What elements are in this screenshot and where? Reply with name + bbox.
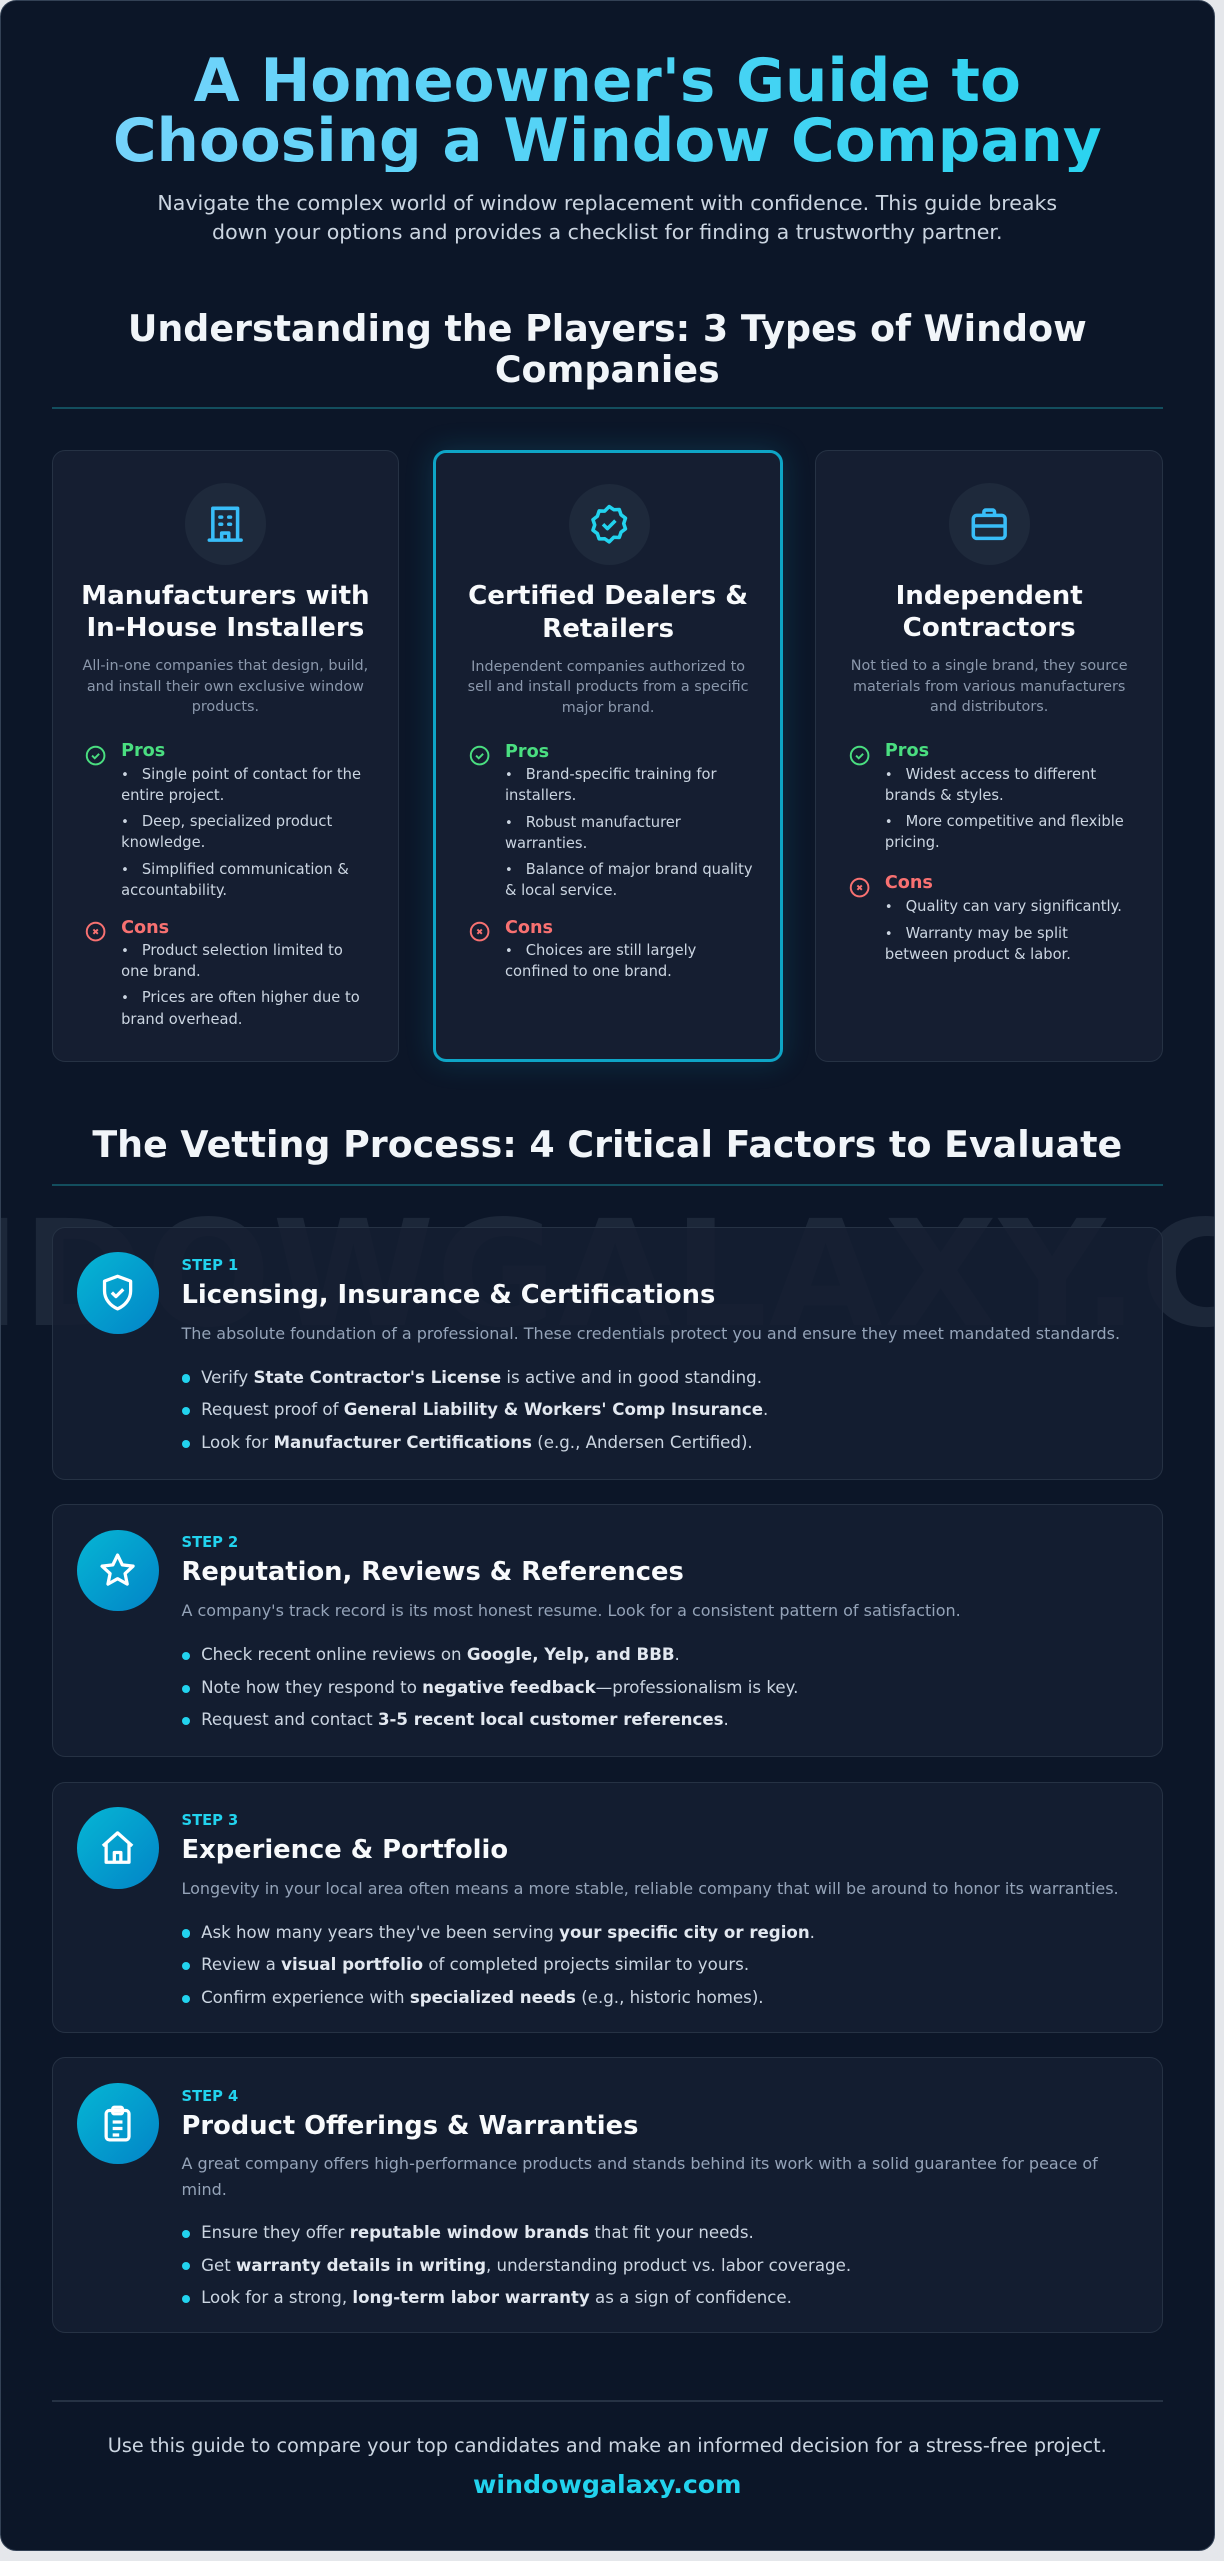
step 2 (52, 1504, 1163, 1757)
step 2: Request and contact 3-5 recent local customer references. (201, 1710, 729, 1729)
icon: shield (77, 1252, 159, 1334)
pros: Deep, specialized product knowledge. (121, 813, 332, 851)
step 1: Look for Manufacturer Certifications (e.g., Andersen Certified). (201, 1433, 753, 1452)
section heading: types: Understanding the Players: 3 Types of Window Companies (128, 307, 1087, 391)
icon: clipboard (77, 2083, 159, 2164)
step 4: Product Offerings & Warranties (182, 2111, 638, 2141)
cons: Warranty may be split between product & labor. (885, 925, 1071, 963)
step 2: Check recent online reviews on Google, Yelp, and BBB. (201, 1645, 680, 1664)
pros: More competitive and flexible pricing. (885, 813, 1124, 851)
cons: Quality can vary significantly. (906, 898, 1122, 915)
step 2: Note how they respond to negative feedback—professionalism is key. (201, 1678, 798, 1697)
pros (470, 742, 753, 899)
step 2: STEP 2 (182, 1534, 238, 1551)
pros: Robust manufacturer warranties. (505, 814, 681, 852)
card title: Independent Contractors (896, 581, 1083, 643)
footer text: Use this guide to compare your top candidates and make an informed decision for a stress-free project. (108, 2434, 1107, 2457)
pros (850, 741, 1124, 851)
panel: manufacturers (52, 450, 399, 1062)
subtitle: Navigate the complex world of window replacement with confidence. This guide breaks down your options and provides a checklist for finding a trustworthy partner. (157, 191, 1057, 244)
cons (850, 873, 1122, 963)
step 3: Ask how many years they've been serving your specific city or region. (201, 1923, 815, 1942)
title: A Homeowner's Guide to (194, 47, 1021, 116)
cons: Prices are often higher due to brand overhead. (121, 989, 360, 1028)
step 1 (52, 1227, 1163, 1480)
step 4 (52, 2057, 1163, 2333)
pros: Single point of contact for the entire project. (121, 766, 361, 804)
title: Choosing a Window Company (113, 107, 1102, 176)
pros: Balance of major brand quality & local service. (505, 861, 753, 899)
step 4: Look for a strong, long-term labor warranty as a sign of confidence. (201, 2288, 792, 2307)
pros: Pros (505, 742, 549, 762)
panel: independent contractors (815, 450, 1163, 1062)
cons: Product selection limited to one brand. (121, 942, 343, 980)
section heading: vetting: The Vetting Process: 4 Critical Factors to Evaluate (92, 1123, 1122, 1166)
step 1: Verify State Contractor's License is active and in good standing. (201, 1368, 762, 1387)
pros (86, 741, 361, 899)
pros: Brand-specific training for installers. (505, 766, 717, 804)
icon: building (185, 483, 266, 565)
step 3: Review a visual portfolio of completed projects similar to yours. (201, 1955, 749, 1974)
pros: Simplified communication & accountability. (121, 861, 349, 899)
icon: home (77, 1807, 159, 1889)
step 2: A company's track record is its most honest resume. Look for a consistent pattern of satisfaction. (182, 1601, 961, 1620)
card description: Independent companies authorized to sell and install products from a specific major brand. (468, 659, 749, 716)
pros: Widest access to different brands & styles. (885, 766, 1096, 804)
cons: Choices are still largely confined to one brand. (505, 942, 696, 980)
cons: Cons (885, 873, 933, 893)
title (1, 52, 1214, 172)
step 1: Request proof of General Liability & Workers' Comp Insurance. (201, 1400, 768, 1419)
card description: All-in-one companies that design, build, and install their own exclusive window products. (83, 658, 368, 715)
step 4: Ensure they offer reputable window brands that fit your needs. (201, 2223, 754, 2242)
card description: Not tied to a single brand, they source materials from various manufacturers and distributors. (851, 658, 1128, 715)
step 3: STEP 3 (182, 1812, 238, 1829)
pros: Pros (121, 741, 165, 761)
icon: badge check (569, 484, 650, 565)
step 3 (52, 1782, 1163, 2033)
cons: Cons (505, 918, 553, 938)
step 4: Get warranty details in writing, understanding product vs. labor coverage. (201, 2256, 851, 2274)
panel: certified dealers (433, 450, 783, 1062)
step 4: A great company offers high-performance products and stands behind its work with a solid guarantee for peace of mind. (182, 2154, 1098, 2199)
step 3: Confirm experience with specialized needs (e.g., historic homes). (201, 1988, 764, 2007)
cons: Cons (121, 918, 169, 938)
icon: star (77, 1530, 159, 1611)
pros: Pros (885, 741, 929, 761)
footer link: windowgalaxy.com (473, 2470, 742, 2499)
step 1: Licensing, Insurance & Certifications (182, 1280, 715, 1310)
cons (470, 918, 696, 980)
card title: Certified Dealers & Retailers (468, 581, 748, 644)
step 1: STEP 1 (182, 1257, 238, 1274)
step 4: STEP 4 (182, 2088, 238, 2105)
card title: Manufacturers with In-House Installers (81, 581, 370, 643)
step 3: Longevity in your local area often means a more stable, reliable company that will be around to honor its warranties. (182, 1879, 1119, 1898)
cons (86, 918, 360, 1028)
step 3: Experience & Portfolio (182, 1835, 508, 1865)
step 2: Reputation, Reviews & References (182, 1557, 684, 1587)
step 1: The absolute foundation of a professional. These credentials protect you and ensure they meet mandated standards. (182, 1324, 1120, 1343)
icon: briefcase (949, 483, 1030, 565)
